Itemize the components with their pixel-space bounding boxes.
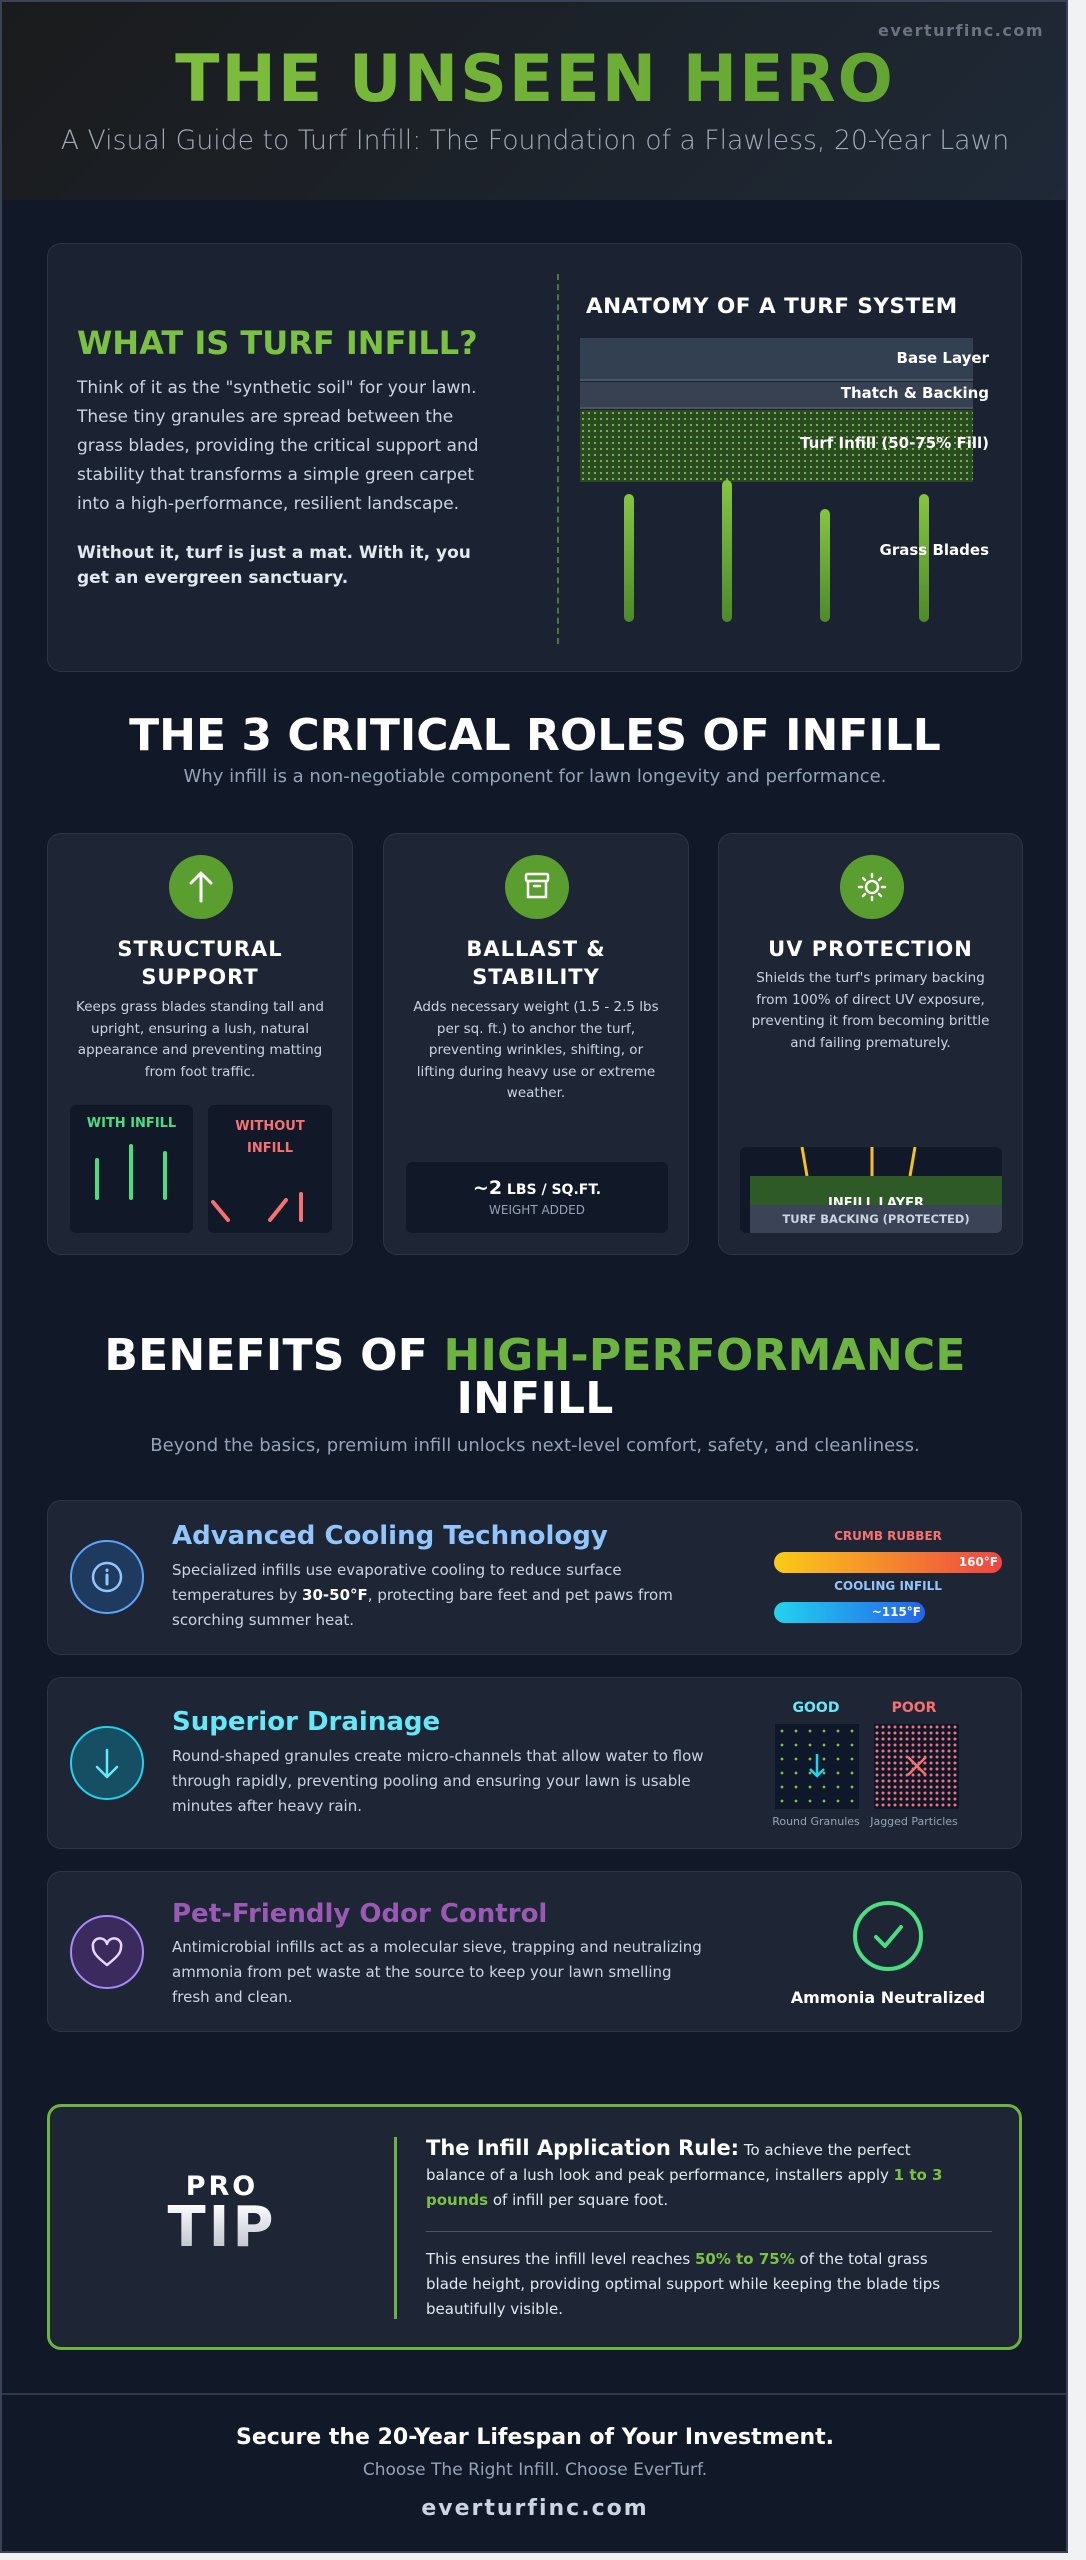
title (2, 40, 1068, 120)
layer: infill (580, 410, 973, 482)
icon: info (70, 1540, 144, 1614)
panel: cooling (47, 1500, 1022, 1655)
card title: BALLAST & (466, 937, 606, 961)
card title: SUPPORT (141, 965, 259, 989)
chart: temperature bars: 160°F (959, 1555, 998, 1569)
chart: temperature bars: ~115°F (872, 1605, 921, 1619)
text block: emphasis: Without it, turf is just a mat. With it, you get an evergreen sanctuary. (77, 543, 471, 588)
diagram: poor drainage: POOR (892, 1700, 936, 1716)
text: Specialized infills use evaporative cooling to reduce surface temperatures by 30-50°F, protecting bare feet and pet paws from scorching summer heat. (172, 1561, 673, 1629)
text block: definition: Think of it as the "synthetic soil" for your lawn. These tiny granules are spread between the grass blades, providing the critical support and stability that transforms a simple green carpet into a high-performance, resilient landscape. (77, 378, 479, 514)
title: Advanced Cooling Technology (172, 1521, 608, 1551)
card title (466, 937, 606, 989)
card title: STABILITY (472, 965, 600, 989)
text: Round-shaped granules create micro-channels that allow water to flow through rapidly, preventing pooling and ensuring your lawn is usable minutes after heavy rain. (172, 1747, 704, 1815)
icon: arrow up (169, 855, 233, 919)
card title: STRUCTURAL (117, 937, 283, 961)
callout: pro tip (47, 2104, 1022, 2350)
chart: temperature bars: CRUMB RUBBER (834, 1529, 942, 1543)
heading: 3 critical roles: THE 3 CRITICAL ROLES OF INFILL (129, 710, 941, 761)
panel: drainage: Jagged Particles (870, 1815, 958, 1828)
footer (2, 2393, 1068, 2555)
title: THE UNSEEN HERO (175, 42, 895, 117)
grass blades (624, 494, 634, 622)
card: structural support (47, 833, 353, 1255)
icon: heart (70, 1915, 144, 1989)
comparison: without infill: INFILL (247, 1141, 293, 1156)
title: Superior Drainage (172, 1707, 440, 1737)
header band (2, 2, 1068, 200)
card title: UV PROTECTION (768, 937, 973, 961)
text: infill level: This ensures the infill level reaches 50% to 75% of the total grass blade height, providing optimal support while keeping the blade tips beautifully visible. (426, 2250, 940, 2318)
site url top: everturfinc.com (878, 21, 1044, 40)
footer headline: Secure the 20-Year Lifespan of Your Investment. (236, 2425, 834, 2450)
stat box: weight (406, 1162, 668, 1233)
diagram: poor drainage (870, 1700, 959, 1828)
stat box: weight: WEIGHT ADDED (489, 1203, 585, 1217)
card text: Keeps grass blades standing tall and upright, ensuring a lush, natural appearance and preventing matting from foot traffic. (76, 999, 324, 1080)
diagram: turf layers: Grass Blades (880, 541, 989, 559)
subtitle: A Visual Guide to Turf Infill: The Foundation of a Flawless, 20-Year Lawn (61, 125, 1009, 156)
panel: drainage: Round Granules (772, 1815, 860, 1828)
card text: Adds necessary weight (1.5 - 2.5 lbs per sq. ft.) to anchor the turf, preventing wrinkles, shifting, or lifting during heavy use or extreme weather. (413, 999, 659, 1101)
diagram: uv layers: TURF BACKING (PROTECTED) (782, 1212, 970, 1226)
card: ballast & stability (383, 833, 689, 1255)
heading: anatomy: ANATOMY OF A TURF SYSTEM (586, 294, 958, 319)
labels: Base Layer (897, 349, 989, 367)
panel: what is turf infill (47, 243, 1022, 672)
layer: thatch (580, 382, 973, 409)
icon: box (505, 855, 569, 919)
comparison: with infill (70, 1105, 193, 1233)
diagram: turf layers: Thatch & Backing (841, 384, 989, 402)
diagram: uv layers (740, 1147, 1002, 1233)
footer tagline: Choose The Right Infill. Choose EverTurf. (363, 2460, 707, 2480)
comparison: without infill (208, 1105, 332, 1233)
heading: what is turf infill: WHAT IS TURF INFILL? (77, 324, 478, 362)
diagram: turf layers: Turf Infill (50-75% Fill) (800, 434, 989, 452)
icon: sun (840, 855, 904, 919)
heading: benefits (104, 1330, 966, 1424)
card: uv protection (718, 833, 1023, 1255)
title: Pet-Friendly Odor Control (172, 1899, 547, 1929)
layer: base (580, 338, 973, 381)
heading: benefits: INFILL (457, 1373, 613, 1424)
diagram: good drainage: GOOD (793, 1700, 839, 1716)
comparison: without infill: WITHOUT (235, 1119, 305, 1134)
panel: drainage (47, 1677, 1022, 1849)
icon: check (853, 1901, 923, 1971)
stat box: weight: ~2 LBS / SQ.FT. (473, 1177, 601, 1199)
comparison: with infill: WITH INFILL (87, 1116, 176, 1131)
pro tip badge: PRO (186, 2171, 258, 2202)
diagram: turf layers (580, 338, 989, 622)
subtitle: benefits: Beyond the basics, premium infill unlocks next-level comfort, safety, and cleanliness. (150, 1435, 920, 1456)
footer url: everturfinc.com (421, 2496, 649, 2521)
diagram: good drainage (772, 1700, 860, 1828)
subtitle: roles: Why infill is a non-negotiable component for lawn longevity and performance. (184, 766, 886, 787)
panel: odor control (47, 1871, 1022, 2032)
heading: benefits: BENEFITS OF HIGH-PERFORMANCE (104, 1330, 966, 1381)
chart: temperature bars: COOLING INFILL (834, 1579, 942, 1593)
caption: ammonia: Ammonia Neutralized (791, 1988, 985, 2007)
card text: Shields the turf's primary backing from 100% of direct UV exposure, preventing it from becoming brittle and failing prematurely. (752, 970, 989, 1050)
text: application rule: The Infill Application Rule: To achieve the perfect balance of a lush look and peak performance, installers apply 1 to 3 pounds of infill per square foot. (426, 2136, 942, 2209)
icon: down arrow (70, 1726, 144, 1800)
pro tip badge: TIP (167, 2195, 277, 2260)
text: Antimicrobial infills act as a molecular sieve, trapping and neutralizing ammonia from pet waste at the source to keep your lawn smelling fresh and clean. (172, 1938, 702, 2006)
chart: temperature bars (774, 1529, 1002, 1623)
card title (117, 937, 283, 989)
